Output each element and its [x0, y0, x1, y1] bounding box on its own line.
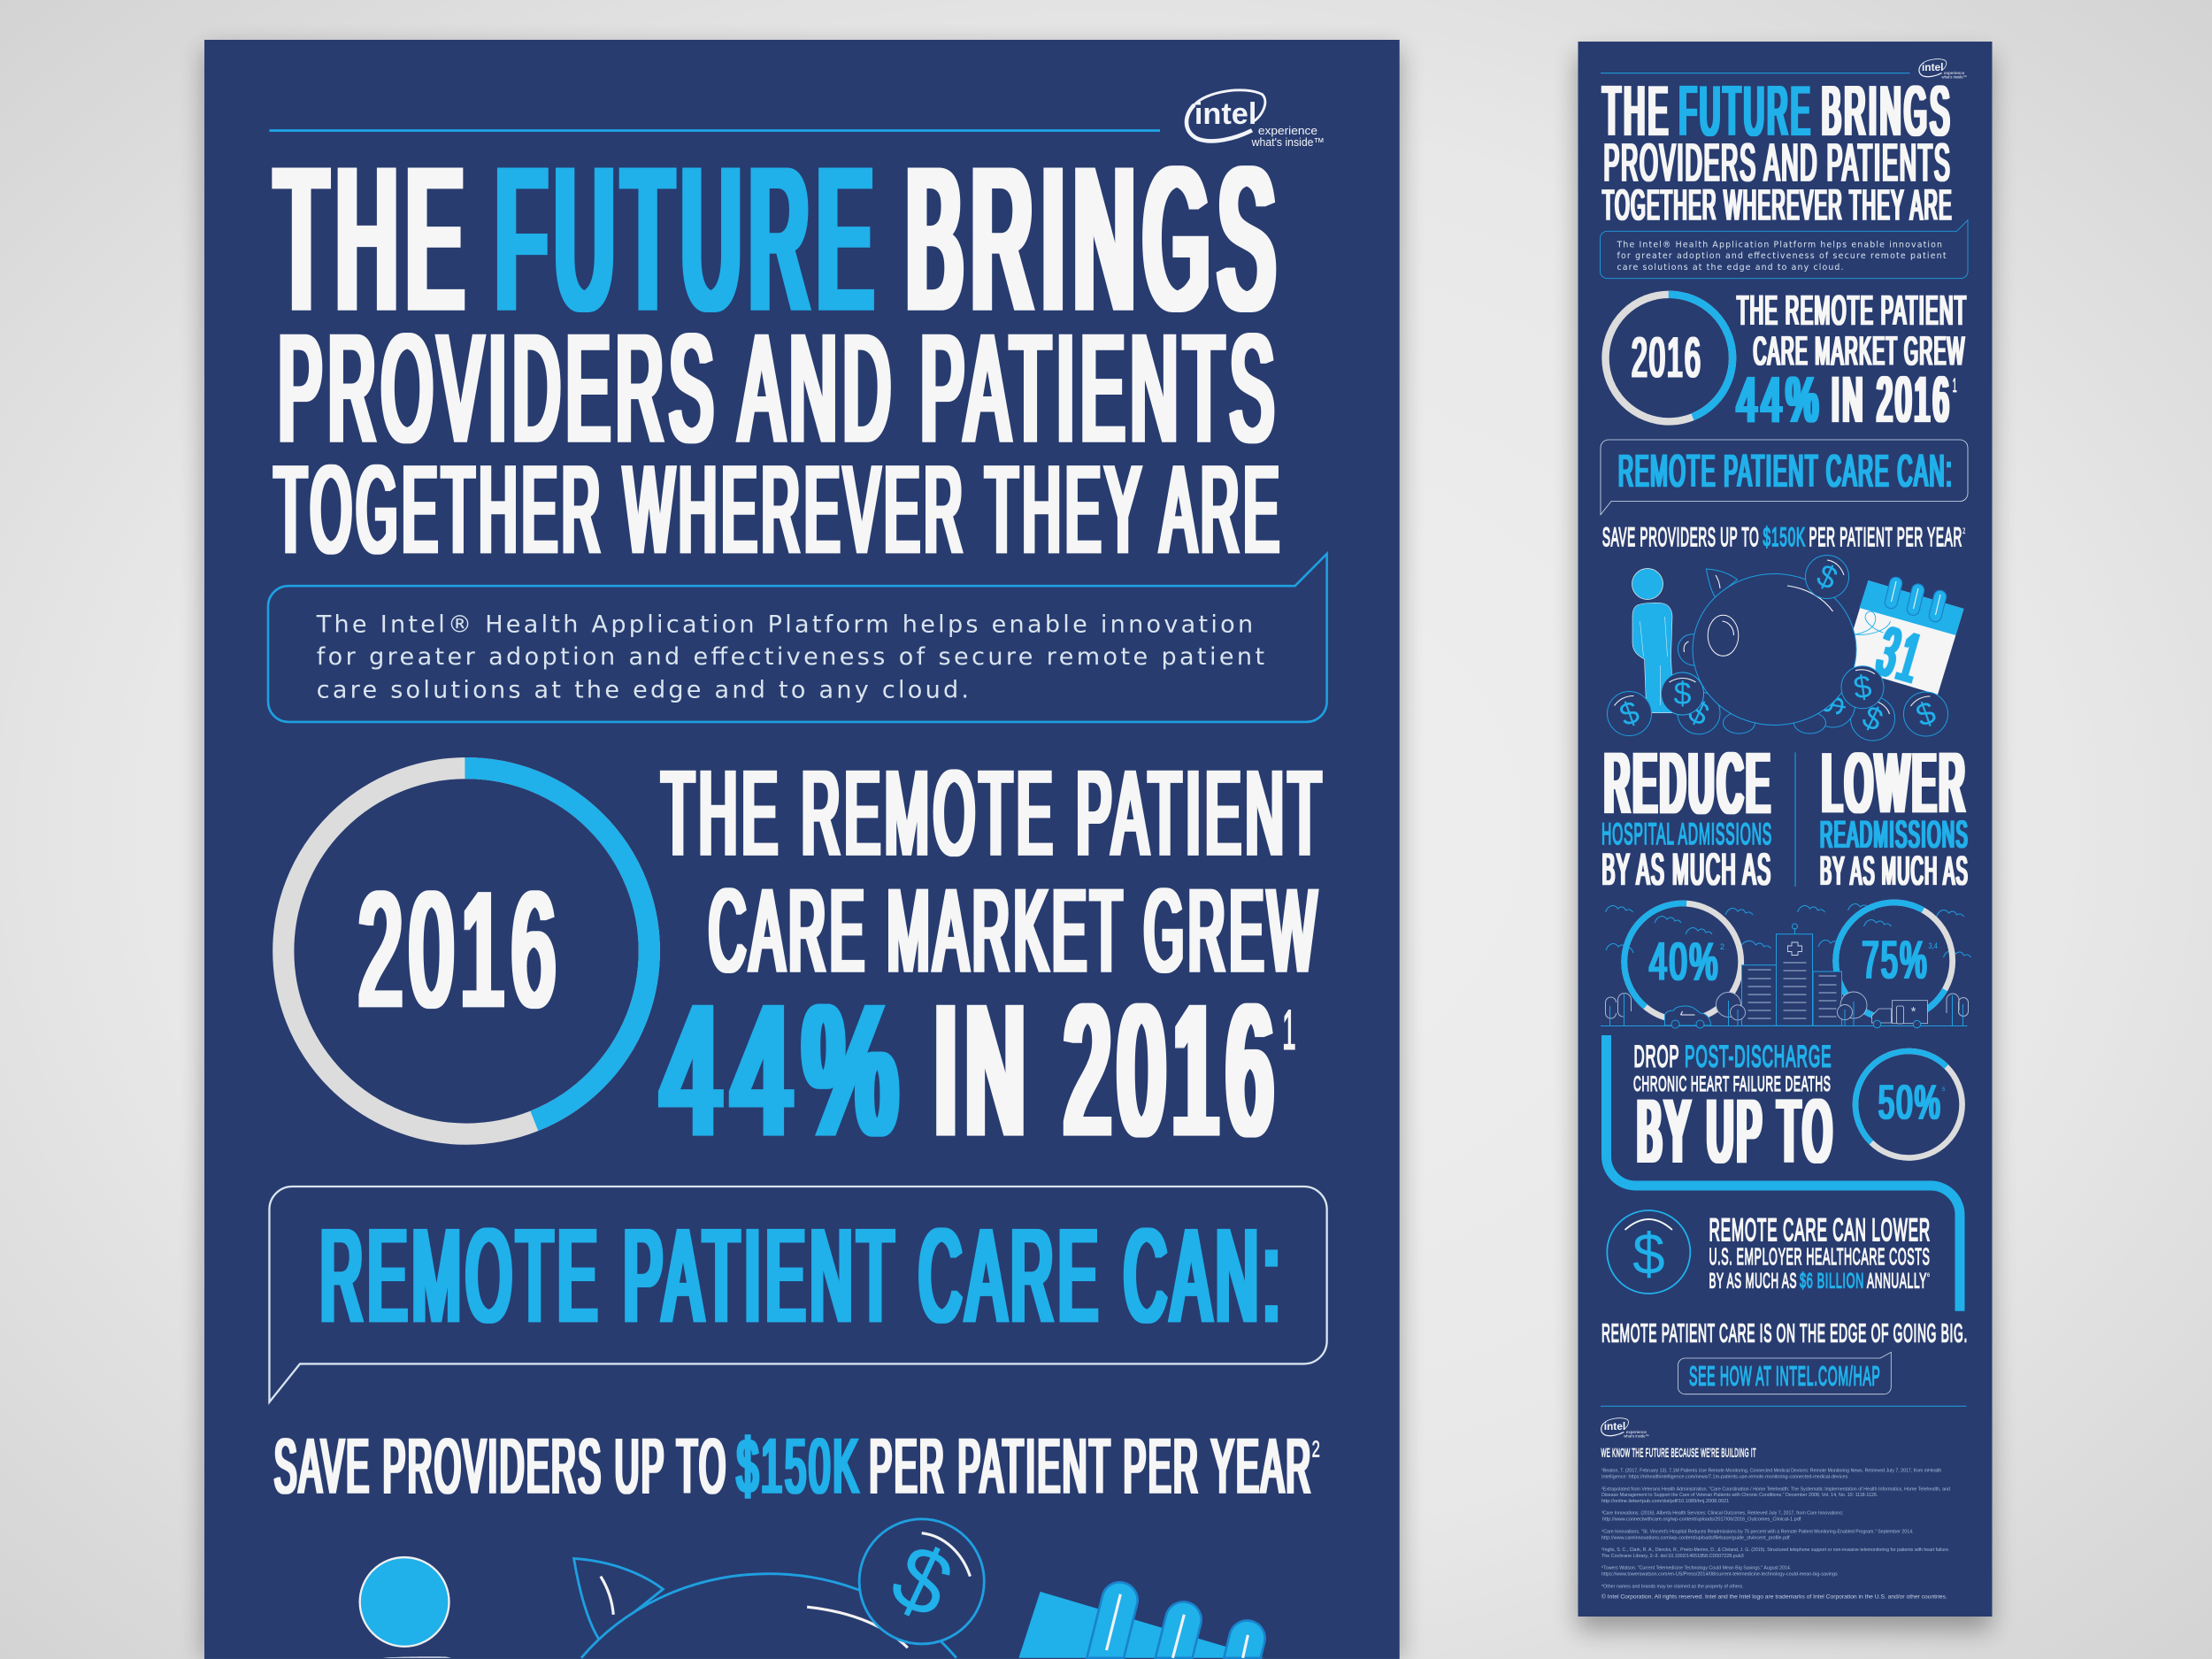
logo: intel: intel: [1194, 97, 1256, 131]
icon: dollar coin: [1607, 1210, 1690, 1294]
footnotes: The Cochrane Library, 2–3. doi:10.1002/14651858.CD007228.pub3: [1601, 1554, 1744, 1559]
panel: large cropped poster: PER PATIENT PER YEAR: [870, 1425, 1313, 1509]
heading: market growth: [662, 748, 1325, 1172]
column: lower readmissions: [1820, 736, 1969, 894]
icon: taxi: [1665, 1006, 1711, 1028]
column: reduce hospital admissions: [1601, 737, 1773, 894]
ring: 2016 growth: 2016: [1632, 327, 1702, 389]
heading: save providers: $150K: [737, 1425, 861, 1509]
footnotes: ²Extrapolated from Veterans Health Administration. "Care Coordination / Home Telehealth: The Systematic Implementation of Health Informatics, Home Telehealth, and: [1601, 1486, 1950, 1492]
panel: full poster: PER PATIENT PER YEAR: [1809, 523, 1962, 552]
illustration: city skyline with rings: [1601, 879, 1974, 1044]
footer logo: intel: [1601, 1418, 1649, 1439]
icon: coins in front: [1607, 556, 1948, 736]
ring: 40 percent: 40%: [1649, 932, 1720, 991]
footnotes: *Other names and brands may be claimed as the property of others.: [1601, 1584, 1744, 1589]
callout: platform description: care solutions at the edge and to any cloud.: [1617, 263, 1844, 273]
text: lower employer costs: 6: [1927, 1272, 1931, 1279]
heading: post-discharge deaths: DROP: [1633, 1041, 1679, 1074]
callout: platform description: for greater adoption and effectiveness of secure remote patient: [1617, 251, 1947, 261]
ring: 75 percent: [1815, 881, 1974, 1041]
panel: full poster: HOSPITAL ADMISSIONS: [1601, 818, 1772, 851]
heading: save providers: $150K: [1763, 523, 1806, 552]
heading: market growth: 44%: [662, 969, 909, 1172]
heading: market growth: 1: [1282, 999, 1298, 1061]
footnotes: ¹Beaton, T. (2017, February 13). 7.1M Patients Use Remote Monitoring, Connected Medical Devices: Remote Monitoring News. Retrieved July 7, 2017, from mHealth: [1601, 1469, 1941, 1474]
heading: post-discharge deaths: CHRONIC HEART FAILURE DEATHS: [1633, 1072, 1832, 1096]
title: FUTURE: [496, 127, 881, 349]
panel: full poster: BY UP TO: [1637, 1083, 1835, 1180]
text: CARE MARKET GREW: [709, 865, 1320, 995]
footnotes: [1601, 1469, 1950, 1601]
icon: calendar: 31: [1870, 611, 1932, 698]
panel: full poster: IN 2016: [1832, 365, 1952, 435]
footer logo: intel: what's inside™: [1624, 1434, 1649, 1439]
ring: 40 percent: 2: [1720, 942, 1724, 951]
footnotes: ⁶Towers Watson. "Current Telemedicine Technology Could Mean Big Savings." August 2014.: [1601, 1566, 1791, 1571]
text: lower employer costs: BY AS MUCH AS: [1709, 1270, 1797, 1294]
title: THE: [1603, 72, 1671, 150]
icon: coins in front: $: [1851, 668, 1874, 706]
icon: dollar coin: $: [1632, 1221, 1665, 1286]
footnotes: ⁵Inglis, S. C., Clark, R. A., Dierckx, R., Prieto-Merino, D., & Cleland, J. G. (2015). Structured telephone support or non-invasive telemonitoring for patients with heart failure.: [1601, 1548, 1949, 1553]
illustration: person, piggy bank, calendar (cropped): $: [878, 1523, 967, 1638]
heading: save providers: SAVE PROVIDERS UP TO: [274, 1425, 728, 1509]
button: see how: [1678, 1352, 1891, 1394]
text: lower employer costs: ANNUALLY: [1867, 1270, 1927, 1294]
panel: full poster: [1578, 42, 1993, 1617]
clouds: [1605, 904, 1971, 957]
ring: 40 percent: [1601, 879, 1765, 1044]
ring: 75 percent: 75%: [1862, 931, 1929, 989]
title: [1602, 72, 1953, 229]
icon: coins in front: $: [1811, 557, 1843, 596]
footer logo: intel: experience: [1626, 1430, 1647, 1434]
icon: coins behind piggy: $: [1857, 698, 1888, 738]
icon: coins behind piggy: $: [1813, 693, 1852, 717]
heading: market growth: 44%: [1737, 365, 1823, 435]
title: [274, 127, 1284, 578]
logo: intel: what's inside™: [1251, 135, 1325, 149]
icon: coins behind piggy: [1678, 683, 1895, 741]
icon: piggy bank: [1678, 569, 1856, 733]
illustration: person, piggy bank, calendar (cropped): [360, 1519, 1265, 1658]
panel: full poster: BRINGS: [1822, 72, 1953, 150]
footer logo: intel: intel: [1604, 1420, 1625, 1432]
panel: full poster: REDUCE: [1605, 737, 1773, 831]
heading: market growth: 1: [1952, 374, 1957, 396]
heading: save providers: 2: [1962, 526, 1966, 535]
panel: large cropped poster: [204, 40, 1400, 1659]
icon: ambulance: *: [1911, 1004, 1916, 1019]
title: THE: [276, 127, 472, 349]
footnotes: http://online.liebertpub.com/doi/pdf/10.1089/tmj.2008.0021: [1601, 1499, 1729, 1504]
ring: 2016 growth: [1605, 295, 1732, 421]
footnotes: Intelligence: https://mhealthintelligence.com/news/7.1m-patients-use-remote-monitoring-connected-medical-devices: [1601, 1475, 1848, 1480]
logo: intel: experience: [1944, 71, 1965, 75]
heading: market growth: [1737, 287, 1968, 435]
panel: full poster: CARE MARKET GREW: [1754, 328, 1966, 373]
icon: person: [1632, 568, 1674, 713]
title: FUTURE: [1679, 72, 1813, 150]
logo: intel: experience: [1258, 124, 1317, 137]
panel: large cropped poster: BRINGS: [906, 127, 1284, 349]
panel: full poster: BY AS MUCH AS: [1820, 849, 1969, 894]
heading: save providers: 2: [1312, 1437, 1321, 1462]
logo: intel: [1919, 59, 1967, 80]
icon: coins in front: $: [1615, 693, 1644, 733]
heading: post-discharge deaths: [1633, 1041, 1835, 1180]
footnotes: Disease Management to Support the Care of Veteran Patients with Chronic Conditions." December 2008, Vol. 14, No. 10: 1118-1126.: [1601, 1493, 1878, 1498]
illustration: person, piggy bank, calendar, coins: [1607, 556, 1964, 741]
ring: 50 percent: [1833, 1029, 1985, 1180]
icon: coins in front: $: [1673, 675, 1692, 711]
panel: full poster: WE KNOW THE FUTURE BECAUSE WE'RE BUILDING IT: [1601, 1446, 1756, 1460]
footnotes: © Intel Corporation. All rights reserved. Intel and the Intel logo are trademarks of Intel Corporation in the U.S. and/or other countries.: [1601, 1594, 1947, 1601]
footnotes: https://www.towerswatson.com/en-US/Press/2014/08/current-telemedicine-technology-could-mean-big-savings: [1601, 1572, 1838, 1578]
ring: 2016 growth: 2016: [358, 861, 563, 1040]
footnotes: http://www.connectwithcare.org/wp-content/uploads/2017/06/2016_Outcomes_Clinical-1.pdf: [1602, 1517, 1801, 1523]
heading: market growth: IN 2016: [934, 969, 1281, 1172]
ring: 50 percent: 50%: [1878, 1076, 1942, 1129]
logo: intel: [1187, 90, 1325, 149]
ring: 50 percent: 5: [1942, 1087, 1946, 1093]
panel: full poster: U.S. EMPLOYER HEALTHCARE COSTS: [1709, 1245, 1931, 1270]
footnotes: ⁴Care Innovations. "St. Vincent's Hospital Reduces Readmissions by 75 percent with a Remote Patient Monitoring-Enabled Program." September 2014.: [1601, 1529, 1914, 1534]
panel: full poster: SEE HOW AT INTEL.COM/HAP: [1689, 1360, 1881, 1391]
ring: 75 percent: 3,4: [1929, 941, 1938, 950]
panel: full poster: BY AS MUCH AS: [1601, 844, 1771, 894]
callout: platform description: [268, 554, 1327, 722]
text: lower employer costs: $6 BILLION: [1800, 1270, 1864, 1294]
heading: post-discharge deaths: POST-DISCHARGE: [1685, 1041, 1832, 1074]
text: lower employer costs: [1709, 1212, 1931, 1294]
hospital buildings: [1741, 924, 1842, 1025]
trees: [1605, 992, 1968, 1025]
panel: full poster: READMISSIONS: [1820, 813, 1969, 856]
callout: platform description: The Intel® Health Application Platform helps enable innovation: [316, 611, 1253, 639]
footnotes: ³Care Innovations. (2016). Alberta Health Services: Clinical Outcomes. Retrieved July 7, 2017, from Care Innovations:: [1601, 1511, 1843, 1517]
text: THE REMOTE PATIENT: [662, 748, 1325, 879]
callout: platform description: for greater adoption and effectiveness of secure remote patient: [317, 643, 1264, 671]
callout: platform description: The Intel® Health Application Platform helps enable innovation: [1616, 241, 1942, 250]
connector: thick blue line: [1607, 1035, 1960, 1311]
heading: save providers: SAVE PROVIDERS UP TO: [1602, 523, 1759, 552]
icon: coins in front: $: [1911, 694, 1940, 733]
logo: intel: intel: [1922, 61, 1943, 73]
icon: calendar: [1842, 576, 1964, 698]
icon: ambulance: [1872, 1001, 1927, 1028]
ring: 2016 growth: [283, 768, 649, 1134]
callout: remote patient care can: [269, 1187, 1327, 1402]
footnotes: http://www.careinnovations.com/wp-content/uploads/filebase/guide_stvincent_profile.pdf: [1601, 1535, 1790, 1540]
panel: full poster: REMOTE CARE CAN LOWER: [1709, 1212, 1931, 1248]
icon: coins behind piggy: $: [1683, 692, 1715, 733]
callout: platform description: care solutions at the edge and to any cloud.: [317, 676, 969, 703]
callout: platform description: [1600, 220, 1968, 279]
text: LOWER: [1823, 736, 1968, 829]
callout: remote patient care can: [1601, 440, 1968, 515]
logo: intel: what's inside™: [1941, 75, 1967, 80]
